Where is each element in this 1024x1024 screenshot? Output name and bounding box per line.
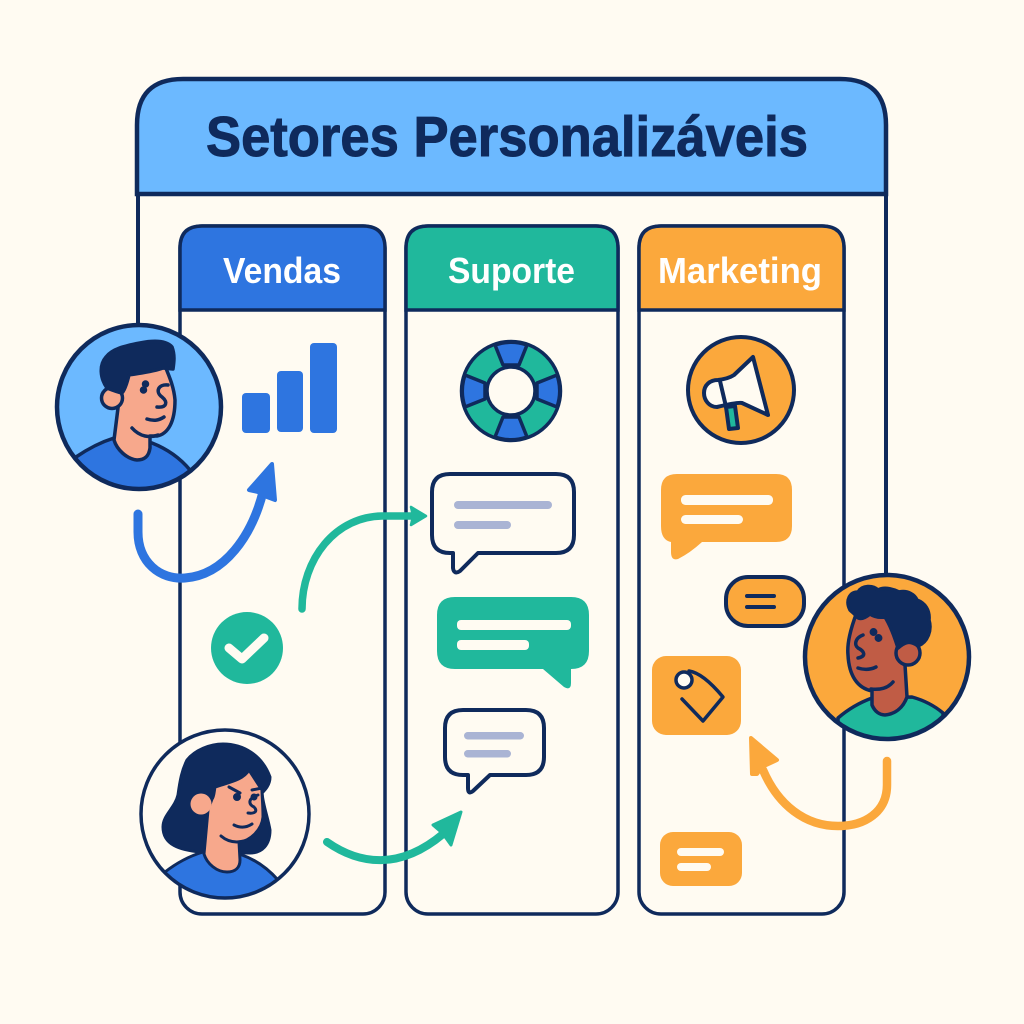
orange message card (660, 832, 742, 886)
icon: price tag (652, 656, 741, 735)
panel: Suporte (406, 226, 618, 914)
pill message (726, 577, 804, 626)
arrow: green lower (327, 812, 461, 860)
arrow: blue (138, 464, 275, 578)
speech bubble: outline large (432, 474, 574, 572)
heading: Suporte: Suporte (448, 250, 575, 291)
panel: Marketing (639, 226, 844, 914)
arrow: orange (751, 738, 887, 826)
speech bubble: green (437, 597, 589, 688)
icon: bar chart (242, 343, 337, 433)
arrow: green upper (302, 507, 426, 609)
title: Setores Personalizáveis (206, 105, 808, 169)
heading: Marketing: Marketing (658, 250, 822, 291)
avatar: man blue (57, 325, 221, 500)
title banner (137, 79, 886, 194)
main card frame (138, 194, 886, 590)
speech bubble: orange (661, 474, 792, 559)
panel: Vendas (180, 226, 385, 914)
icon: check badge (211, 612, 283, 684)
icon: megaphone (688, 337, 794, 443)
speech bubble: outline small (445, 710, 544, 792)
heading: Vendas: Vendas (223, 250, 341, 291)
icon: support wheel (462, 342, 560, 440)
avatar: woman (141, 730, 309, 900)
avatar: man orange (805, 575, 969, 750)
